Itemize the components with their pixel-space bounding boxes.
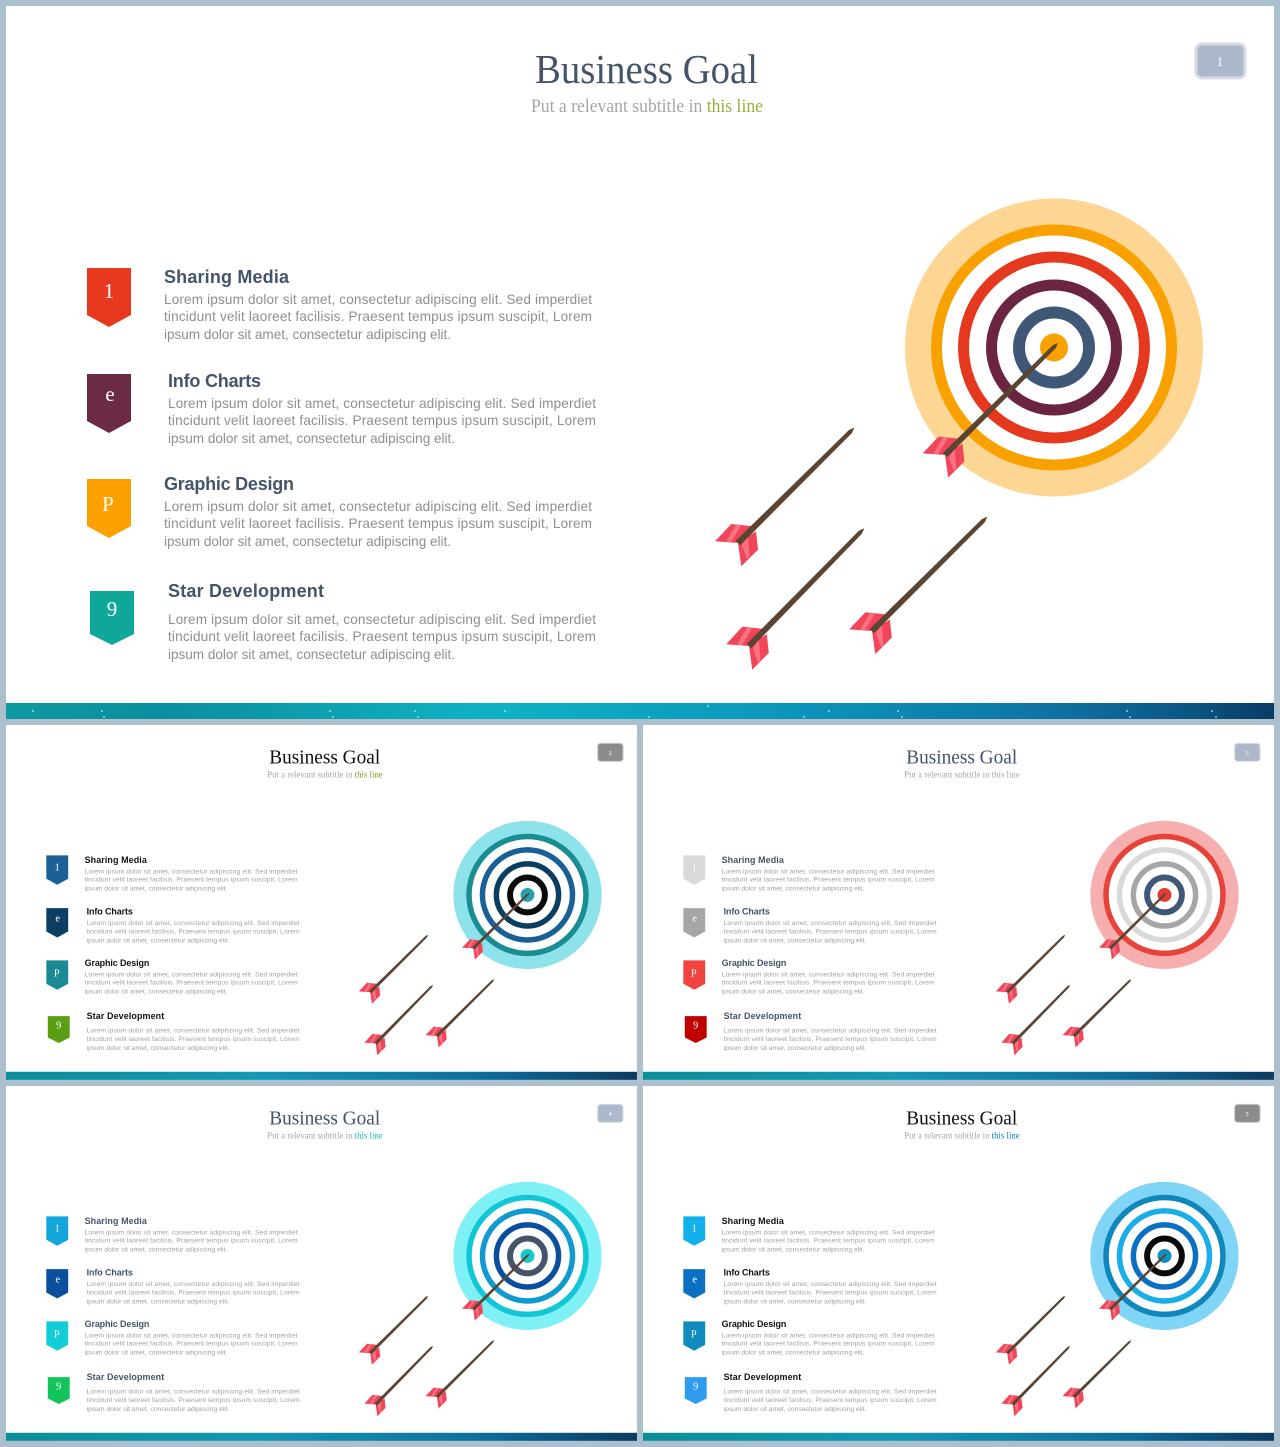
item: Graphic Design: P: [691, 968, 697, 979]
item: Info Charts: Lorem ipsum dolor sit amet, consectetur adipiscing elit. Sed imperdiet: [87, 920, 300, 927]
title: Business Goal: [535, 46, 758, 92]
item: Star Development: Lorem ipsum dolor sit amet, consectetur adipiscing elit. Sed imperdiet: [168, 612, 596, 627]
item: Sharing Media: tincidunt velit laoreet facilisis. Praesent tempus ipsum suscipit, Lorem: [164, 309, 592, 324]
page number badge: 4: [608, 1111, 612, 1118]
item: Info Charts: tincidunt velit laoreet facilisis. Praesent tempus ipsum suscipit, Lorem: [724, 928, 937, 935]
item: Graphic Design: Graphic Design: [722, 958, 786, 968]
item: Star Development: Lorem ipsum dolor sit amet, consectetur adipiscing elit. Sed imperdiet: [724, 1389, 937, 1396]
item: Info Charts: e: [692, 1275, 697, 1286]
item: Sharing Media: 1: [692, 1223, 697, 1234]
subtitle: Put a relevant subtitle in this line: [904, 770, 1020, 780]
arrow 1: [715, 428, 854, 566]
item: Sharing Media: Lorem ipsum dolor sit amet, consectetur adipiscing elit. Sed imperdiet: [722, 868, 935, 875]
item: Sharing Media: 1: [692, 862, 697, 873]
item: Info Charts: [683, 907, 937, 944]
item: Info Charts: [46, 907, 300, 944]
item: Info Charts: [87, 371, 596, 446]
footer strip: [643, 1072, 1274, 1080]
arrow 3: [426, 979, 494, 1047]
item: Sharing Media: [87, 267, 592, 342]
page number badge: 1: [1217, 54, 1223, 69]
item: Info Charts: e: [55, 1275, 60, 1286]
item: Star Development: [685, 1372, 937, 1413]
item: Star Development: ipsum dolor sit amet, consectetur adipiscing elit.: [87, 1045, 230, 1052]
item: Sharing Media: 1: [55, 862, 60, 873]
arrow 1: [359, 1296, 428, 1365]
item: Info Charts: [683, 1268, 937, 1305]
target with arrow: [1090, 821, 1239, 969]
item: Star Development: tincidunt velit laoreet facilisis. Praesent tempus ipsum suscipit, Lorem: [724, 1397, 937, 1404]
footer strip: [6, 1433, 637, 1441]
subtitle: Put a relevant subtitle in this line: [267, 1131, 383, 1141]
item: Star Development: Lorem ipsum dolor sit amet, consectetur adipiscing elit. Sed imperdiet: [87, 1028, 300, 1035]
page number badge: [598, 1104, 623, 1122]
item: Graphic Design: [683, 1319, 935, 1357]
page number badge: [1196, 44, 1245, 78]
arrow 1: [996, 935, 1065, 1004]
item: Sharing Media: Lorem ipsum dolor sit amet, consectetur adipiscing elit. Sed imperdiet: [722, 1229, 935, 1236]
item: Info Charts: Lorem ipsum dolor sit amet, consectetur adipiscing elit. Sed imperdiet: [168, 396, 596, 411]
item: Info Charts: [46, 1268, 300, 1305]
item: Graphic Design: [87, 474, 592, 549]
item: Graphic Design: [46, 1319, 298, 1357]
subtitle: Put a relevant subtitle in this line: [531, 97, 763, 117]
arrow 3: [1063, 979, 1131, 1047]
item: Sharing Media: Lorem ipsum dolor sit amet, consectetur adipiscing elit. Sed imperdiet: [164, 292, 592, 307]
item: Graphic Design: tincidunt velit laoreet facilisis. Praesent tempus ipsum suscipit, Lorem: [85, 980, 298, 987]
item: Sharing Media: Sharing Media: [85, 1216, 148, 1226]
item: Star Development: [685, 1011, 937, 1052]
page number badge: [1235, 1104, 1260, 1122]
item: Info Charts: ipsum dolor sit amet, consectetur adipiscing elit.: [87, 937, 230, 944]
item: Graphic Design: ipsum dolor sit amet, consectetur adipiscing elit.: [722, 1350, 865, 1357]
item: Graphic Design: P: [54, 968, 60, 979]
target with arrow: [453, 1182, 602, 1330]
item: Star Development: [48, 1372, 300, 1413]
item: Star Development: 9: [693, 1021, 698, 1032]
arrow 3: [426, 1340, 494, 1408]
item: Sharing Media: [46, 1216, 298, 1254]
item: Star Development: 9: [56, 1382, 61, 1393]
item: Graphic Design: ipsum dolor sit amet, consectetur adipiscing elit.: [85, 989, 228, 996]
item: Graphic Design: [683, 958, 935, 996]
item: Info Charts: Lorem ipsum dolor sit amet, consectetur adipiscing elit. Sed imperdiet: [724, 920, 937, 927]
item: Info Charts: Info Charts: [87, 1268, 133, 1278]
item: Star Development: [48, 1011, 300, 1052]
item: Graphic Design: [46, 958, 298, 996]
item: Sharing Media: 1: [55, 1223, 60, 1234]
target with arrow: [453, 821, 602, 969]
item: Graphic Design: Lorem ipsum dolor sit amet, consectetur adipiscing elit. Sed imperdiet: [722, 1332, 935, 1339]
item: Info Charts: Lorem ipsum dolor sit amet, consectetur adipiscing elit. Sed imperdiet: [87, 1281, 300, 1288]
item: Info Charts: tincidunt velit laoreet facilisis. Praesent tempus ipsum suscipit, Lorem: [87, 1289, 300, 1296]
title: Business Goal: [906, 1107, 1018, 1129]
item: Sharing Media: Lorem ipsum dolor sit amet, consectetur adipiscing elit. Sed imperdiet: [85, 868, 298, 875]
page number badge: [1235, 743, 1260, 761]
item: Sharing Media: 1: [104, 279, 114, 303]
panel: slide 5 sky-blue variation: [643, 1086, 1274, 1441]
item: Star Development: Star Development: [87, 1011, 164, 1021]
item: Graphic Design: tincidunt velit laoreet facilisis. Praesent tempus ipsum suscipit, Lorem: [722, 1341, 935, 1348]
item: Graphic Design: Graphic Design: [164, 474, 294, 494]
item: Sharing Media: tincidunt velit laoreet facilisis. Praesent tempus ipsum suscipit, Lorem: [85, 877, 298, 884]
item: Info Charts: ipsum dolor sit amet, consectetur adipiscing elit.: [724, 1298, 867, 1305]
item: Info Charts: tincidunt velit laoreet facilisis. Praesent tempus ipsum suscipit, Lorem: [724, 1289, 937, 1296]
item: Sharing Media: Sharing Media: [722, 1216, 785, 1226]
item: Sharing Media: ipsum dolor sit amet, consectetur adipiscing elit.: [85, 1247, 228, 1254]
page number badge: 3: [1245, 750, 1249, 757]
footer strip: [6, 703, 1274, 719]
item: Star Development: ipsum dolor sit amet, consectetur adipiscing elit.: [168, 647, 455, 662]
item: Info Charts: ipsum dolor sit amet, consectetur adipiscing elit.: [724, 937, 867, 944]
item: Star Development: ipsum dolor sit amet, consectetur adipiscing elit.: [724, 1045, 867, 1052]
item: Info Charts: e: [105, 382, 115, 406]
item: Graphic Design: Lorem ipsum dolor sit amet, consectetur adipiscing elit. Sed imperdiet: [164, 499, 592, 514]
item: Star Development: 9: [693, 1382, 698, 1393]
item: Graphic Design: P: [691, 1329, 697, 1340]
item: Graphic Design: ipsum dolor sit amet, consectetur adipiscing elit.: [164, 534, 451, 549]
item: Star Development: Lorem ipsum dolor sit amet, consectetur adipiscing elit. Sed imperdiet: [87, 1389, 300, 1396]
item: Star Development: Lorem ipsum dolor sit amet, consectetur adipiscing elit. Sed imperdiet: [724, 1028, 937, 1035]
item: Graphic Design: Lorem ipsum dolor sit amet, consectetur adipiscing elit. Sed imperdiet: [722, 971, 935, 978]
subtitle: Put a relevant subtitle in this line: [267, 770, 383, 780]
arrow 1: [359, 935, 428, 1004]
item: Sharing Media: Sharing Media: [164, 267, 290, 287]
item: Graphic Design: P: [54, 1329, 60, 1340]
item: Graphic Design: ipsum dolor sit amet, consectetur adipiscing elit.: [85, 1350, 228, 1357]
page number badge: 5: [1245, 1111, 1249, 1118]
footer strip: [6, 1072, 637, 1080]
item: Graphic Design: Graphic Design: [85, 958, 149, 968]
item: Star Development: [90, 581, 596, 662]
item: Info Charts: Info Charts: [87, 907, 133, 917]
item: Info Charts: ipsum dolor sit amet, consectetur adipiscing elit.: [168, 431, 455, 446]
item: Sharing Media: tincidunt velit laoreet facilisis. Praesent tempus ipsum suscipit, Lorem: [85, 1238, 298, 1245]
item: Info Charts: tincidunt velit laoreet facilisis. Praesent tempus ipsum suscipit, Lorem: [168, 413, 596, 428]
item: Graphic Design: Graphic Design: [722, 1319, 786, 1329]
arrow 2: [364, 1346, 433, 1416]
item: Graphic Design: Lorem ipsum dolor sit amet, consectetur adipiscing elit. Sed imperdiet: [85, 971, 298, 978]
item: Info Charts: ipsum dolor sit amet, consectetur adipiscing elit.: [87, 1298, 230, 1305]
item: Sharing Media: tincidunt velit laoreet facilisis. Praesent tempus ipsum suscipit, Lorem: [722, 1238, 935, 1245]
item: Sharing Media: Sharing Media: [722, 855, 785, 865]
panel: slide 4 cyan variation: [6, 1086, 637, 1441]
item: Sharing Media: ipsum dolor sit amet, consectetur adipiscing elit.: [164, 327, 451, 342]
arrow 3: [849, 517, 987, 654]
item: Star Development: ipsum dolor sit amet, consectetur adipiscing elit.: [87, 1406, 230, 1413]
panel: main slide: [6, 6, 1274, 719]
item: Sharing Media: ipsum dolor sit amet, consectetur adipiscing elit.: [85, 886, 228, 893]
item: Graphic Design: ipsum dolor sit amet, consectetur adipiscing elit.: [722, 989, 865, 996]
item: Star Development: tincidunt velit laoreet facilisis. Praesent tempus ipsum suscipit, Lorem: [87, 1036, 300, 1043]
arrow 3: [1063, 1340, 1131, 1408]
arrow 1: [996, 1296, 1065, 1365]
item: Star Development: 9: [56, 1021, 61, 1032]
item: Sharing Media: [46, 855, 298, 893]
item: Star Development: tincidunt velit laoreet facilisis. Praesent tempus ipsum suscipit, Lorem: [724, 1036, 937, 1043]
arrow 2: [726, 528, 864, 670]
panel: slide 3 red-grey variation: [643, 725, 1274, 1080]
item: Graphic Design: P: [102, 492, 114, 516]
title: Business Goal: [269, 1107, 381, 1129]
item: Info Charts: Info Charts: [168, 371, 261, 391]
item: Graphic Design: tincidunt velit laoreet facilisis. Praesent tempus ipsum suscipit, Lorem: [164, 516, 592, 531]
arrow 2: [1001, 1346, 1070, 1416]
item: Star Development: tincidunt velit laoreet facilisis. Praesent tempus ipsum suscipit, Lorem: [87, 1397, 300, 1404]
item: Info Charts: Info Charts: [724, 907, 770, 917]
arrow 2: [1001, 985, 1070, 1055]
item: Sharing Media: ipsum dolor sit amet, consectetur adipiscing elit.: [722, 1247, 865, 1254]
subtitle: Put a relevant subtitle in this line: [904, 1131, 1020, 1141]
page number badge: [598, 743, 623, 761]
page number badge: 2: [608, 750, 612, 757]
item: Star Development: Star Development: [87, 1372, 164, 1382]
item: Graphic Design: Lorem ipsum dolor sit amet, consectetur adipiscing elit. Sed imperdiet: [85, 1332, 298, 1339]
item: Info Charts: Lorem ipsum dolor sit amet, consectetur adipiscing elit. Sed imperdiet: [724, 1281, 937, 1288]
item: Sharing Media: ipsum dolor sit amet, consectetur adipiscing elit.: [722, 886, 865, 893]
item: Star Development: Star Development: [168, 581, 324, 601]
panel: slide 2 blue-teal variation: [6, 725, 637, 1080]
target with arrow: [905, 198, 1203, 496]
item: Star Development: ipsum dolor sit amet, consectetur adipiscing elit.: [724, 1406, 867, 1413]
item: Star Development: Star Development: [724, 1372, 801, 1382]
arrow 2: [364, 985, 433, 1055]
item: Info Charts: e: [55, 914, 60, 925]
item: Info Charts: e: [692, 914, 697, 925]
item: Info Charts: tincidunt velit laoreet facilisis. Praesent tempus ipsum suscipit, Lorem: [87, 928, 300, 935]
footer strip: [643, 1433, 1274, 1441]
title: Business Goal: [269, 746, 381, 768]
item: Graphic Design: Graphic Design: [85, 1319, 149, 1329]
item: Sharing Media: tincidunt velit laoreet facilisis. Praesent tempus ipsum suscipit, Lorem: [722, 877, 935, 884]
item: Star Development: Star Development: [724, 1011, 801, 1021]
item: Sharing Media: [683, 1216, 935, 1254]
item: Sharing Media: Sharing Media: [85, 855, 148, 865]
target with arrow: [1090, 1182, 1239, 1330]
item: Info Charts: Info Charts: [724, 1268, 770, 1278]
item: Star Development: 9: [107, 597, 117, 621]
item: Graphic Design: tincidunt velit laoreet facilisis. Praesent tempus ipsum suscipit, Lorem: [85, 1341, 298, 1348]
item: Sharing Media: Lorem ipsum dolor sit amet, consectetur adipiscing elit. Sed imperdiet: [85, 1229, 298, 1236]
item: Graphic Design: tincidunt velit laoreet facilisis. Praesent tempus ipsum suscipit, Lorem: [722, 980, 935, 987]
title: Business Goal: [906, 746, 1018, 768]
item: Star Development: tincidunt velit laoreet facilisis. Praesent tempus ipsum suscipit, Lorem: [168, 629, 596, 644]
item: Sharing Media: [683, 855, 935, 893]
